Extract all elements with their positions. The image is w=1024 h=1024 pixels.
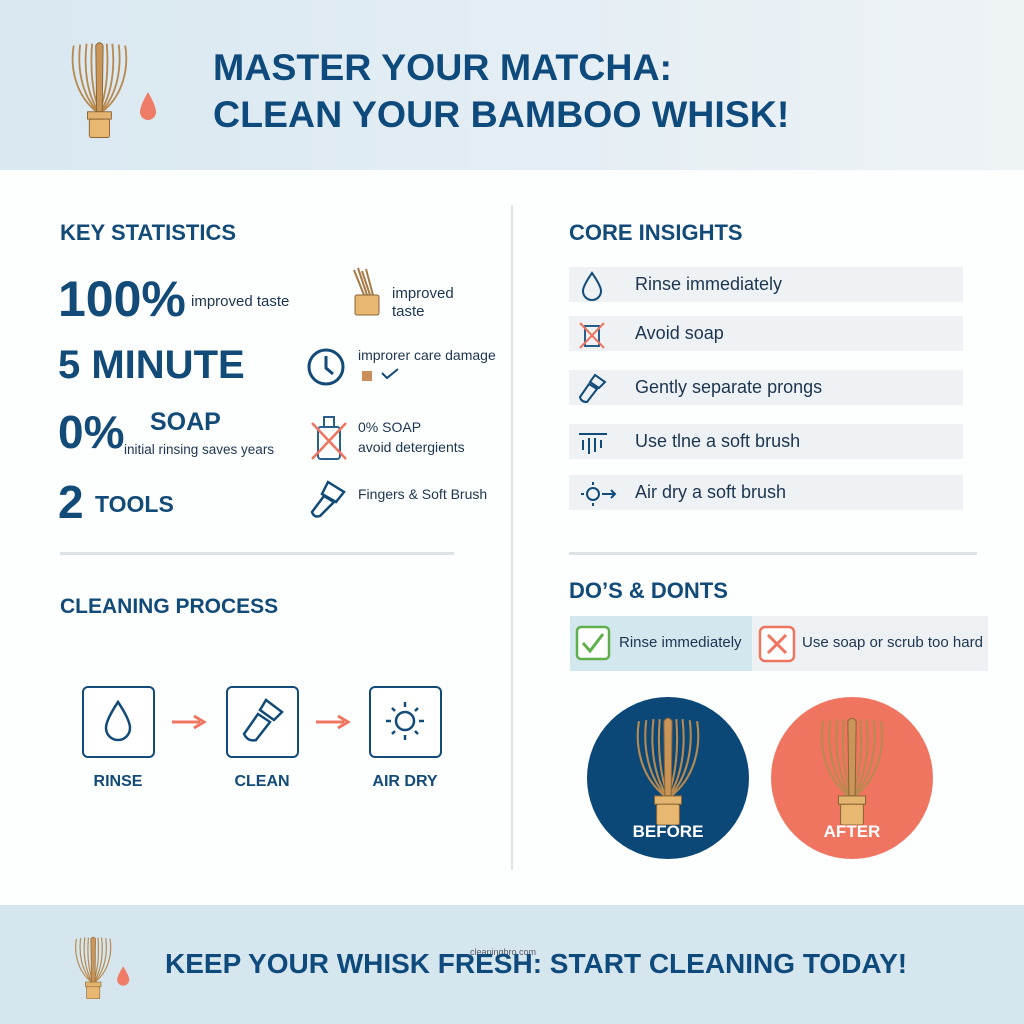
footer banner [0, 905, 1024, 1024]
heading: do's and donts: DO’S & DONTS [569, 578, 728, 603]
before circle [587, 697, 749, 859]
icon: whisk with drop [72, 42, 156, 138]
stats block: 100% [58, 271, 186, 327]
stats block: 5 MINUTE [58, 343, 245, 387]
process flow: CLEAN [234, 773, 290, 790]
process flow: AIR DRY [372, 773, 438, 790]
insights list: Gently separate prongs [635, 377, 822, 397]
insights list: Air dry a soft brush [635, 482, 786, 502]
stats block: 0% SOAP [358, 419, 421, 435]
step: rinse [82, 686, 155, 758]
do/dont band [570, 616, 988, 671]
title [213, 46, 789, 135]
stats block: taste [392, 303, 425, 320]
stats block [58, 268, 496, 528]
stats block: 2 [58, 476, 84, 528]
footer banner: cleapingbro.com [470, 947, 536, 957]
stats block: TOOLS [95, 491, 174, 517]
after circle [771, 697, 933, 859]
heading: key statistics: KEY STATISTICS [60, 220, 236, 245]
before circle: BEFORE [633, 822, 703, 841]
insights list: Avoid soap [635, 323, 724, 343]
stats block: SOAP [150, 408, 221, 436]
title: CLEAN YOUR BAMBOO WHISK! [213, 93, 789, 135]
do item: Rinse immediately [619, 634, 742, 651]
arrow [316, 714, 351, 730]
after circle: AFTER [824, 822, 880, 841]
icons column [353, 268, 380, 316]
heading: cleaning process: CLEANING PROCESS [60, 595, 278, 618]
insights list [569, 267, 963, 510]
dont item: Use soap or scrub too hard [802, 634, 983, 651]
stats block: initial rinsing saves years [124, 442, 274, 457]
footer slogan: KEEP YOUR WHISK FRESH: START CLEANING TODAY! [165, 948, 907, 979]
stats block: improrer care damage [358, 347, 496, 363]
insights list: Use tlne a soft brush [635, 431, 800, 451]
process flow: RINSE [94, 773, 142, 790]
step: air dry [369, 686, 442, 758]
stats block: Fingers & Soft Brush [358, 486, 487, 502]
stats block: 0% [58, 406, 124, 458]
do item [570, 616, 752, 671]
icon: small whisk [75, 936, 130, 999]
step: clean [226, 686, 299, 758]
heading: core insights: CORE INSIGHTS [569, 220, 743, 245]
stats block: avoid detergients [358, 439, 465, 455]
title: MASTER YOUR MATCHA: [213, 46, 672, 88]
header banner [0, 0, 1024, 170]
arrow [172, 714, 207, 730]
process flow [82, 686, 442, 790]
stats block: improved taste [191, 293, 289, 310]
dont item [752, 616, 988, 671]
stats block: improved [392, 285, 454, 302]
insights list: Rinse immediately [635, 274, 782, 294]
